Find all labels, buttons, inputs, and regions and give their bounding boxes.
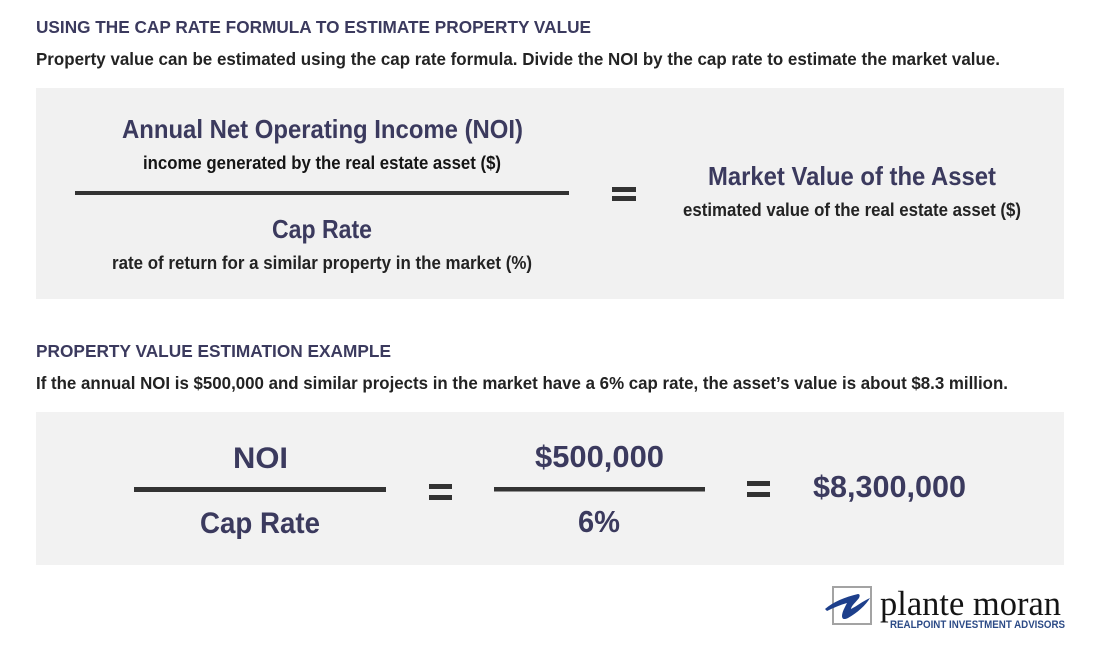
denominator description: rate of return for a similar property in the market (%) (112, 253, 532, 273)
first fraction bar (134, 487, 386, 492)
6% denominator: 6% (578, 504, 620, 539)
equals sign (612, 187, 636, 201)
second equals sign (747, 481, 770, 497)
numerator label: Annual Net Operating Income (NOI) (122, 114, 523, 144)
wordmark: plante moran (880, 584, 1061, 623)
NOI numerator: NOI (233, 442, 288, 475)
tagline: REALPOINT INVESTMENT ADVISORS (890, 619, 1065, 631)
fraction bar (75, 191, 569, 195)
second fraction bar (494, 487, 705, 492)
denominator label: Cap Rate (272, 214, 372, 244)
example heading: PROPERTY VALUE ESTIMATION EXAMPLE (36, 341, 391, 361)
panel: worked example (36, 412, 1064, 565)
result value: $8,300,000 (813, 469, 966, 504)
numerator description: income generated by the real estate asset ($) (143, 153, 501, 173)
icon: logo square and swoosh (825, 587, 871, 624)
cap rate denominator: Cap Rate (200, 507, 320, 540)
intro text: Property value can be estimated using the cap rate formula. Divide the NOI by the cap rate to estimate the market value. (36, 49, 1000, 69)
result label: Market Value of the Asset (708, 161, 996, 191)
first equals sign (429, 484, 452, 500)
result description: estimated value of the real estate asset ($) (683, 200, 1021, 220)
panel: cap rate formula (36, 88, 1064, 299)
title: USING THE CAP RATE FORMULA TO ESTIMATE PROPERTY VALUE (36, 17, 591, 37)
$500,000 numerator: $500,000 (535, 439, 664, 474)
logo: plante moran (825, 584, 1065, 631)
example text: If the annual NOI is $500,000 and similar projects in the market have a 6% cap rate, the asset’s value is about $8.3 million. (36, 373, 1008, 393)
